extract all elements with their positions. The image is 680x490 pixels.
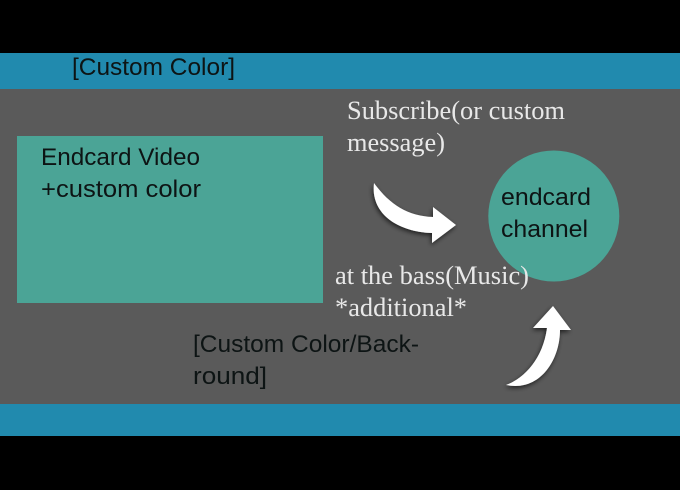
- subscribe message text: message): [347, 128, 445, 157]
- endcard channel circle: [488, 150, 619, 282]
- subscribe message text: Subscribe(or custom: [347, 96, 565, 125]
- channel label: channel: [501, 216, 588, 243]
- endcard label: endcard: [501, 184, 591, 211]
- background label: [Custom Color/Back-: [193, 331, 419, 358]
- custom color label: +custom color: [41, 176, 201, 203]
- endcard video label: Endcard Video: [41, 144, 200, 171]
- bottom color bar: [0, 404, 680, 436]
- background label: [193, 331, 419, 390]
- top bar label: [Custom Color]: [72, 54, 235, 81]
- subscribe message text: [347, 96, 565, 157]
- background panel: [0, 89, 680, 404]
- music text: *additional*: [335, 293, 467, 322]
- top color bar: [0, 53, 680, 89]
- music text: [335, 261, 529, 322]
- arrow: to channel: [374, 183, 456, 243]
- music text: at the bass(Music): [335, 261, 529, 290]
- arrow: up to channel: [506, 306, 571, 386]
- background label: round]: [193, 363, 267, 390]
- panel: endcard video: [17, 136, 323, 303]
